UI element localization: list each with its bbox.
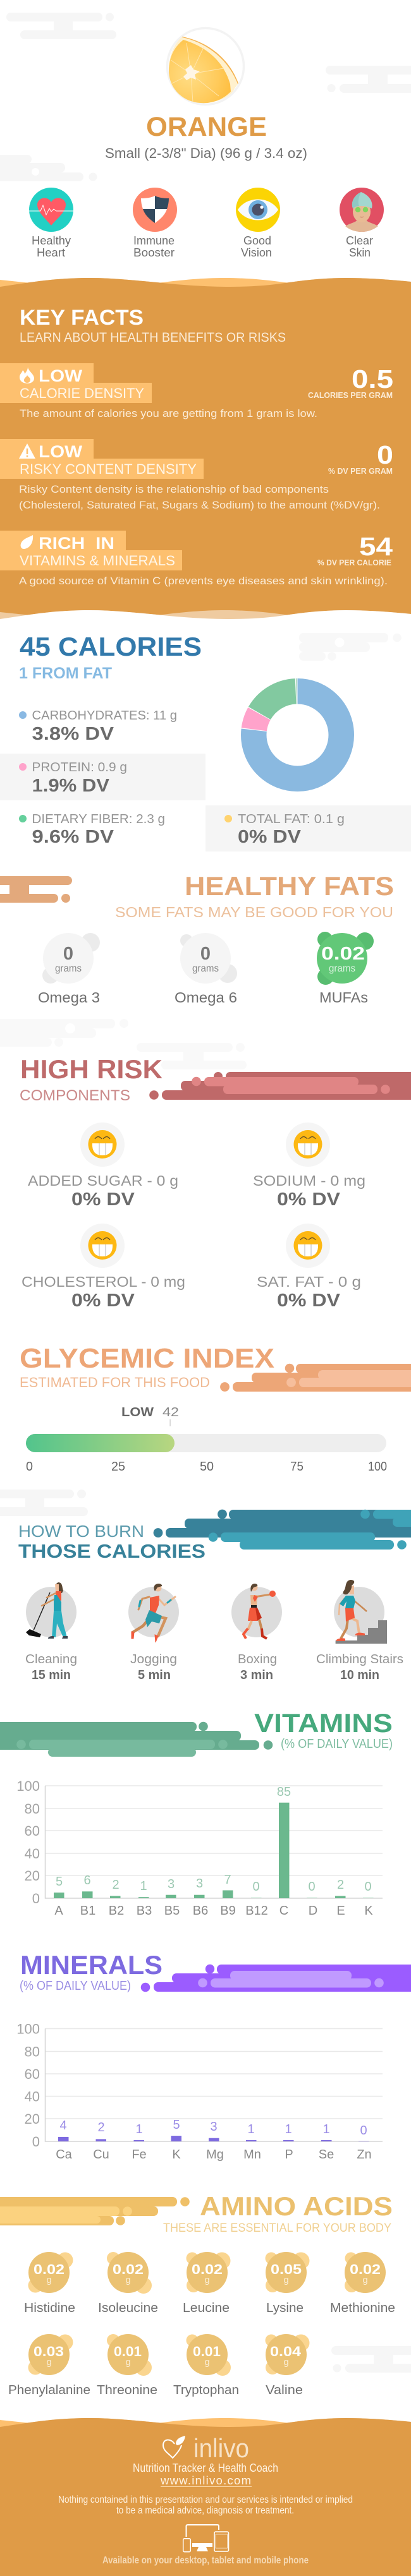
icon: person boxing [243, 1584, 276, 1639]
icon: person running [132, 1584, 175, 1642]
risk item: added sugar: ADDED SUGAR - 0 g [28, 1172, 178, 1189]
swoosh: minerals [141, 1965, 411, 1992]
bar chart: minerals: 1 [247, 2122, 255, 2136]
icon: devices [183, 2525, 229, 2552]
icon: person climbing stairs [336, 1580, 387, 1644]
label: clear: Clear [346, 234, 373, 247]
logo: heart and leaf [163, 2436, 185, 2458]
subheading: amino acids: THESE ARE ESSENTIAL FOR YOUR BODY [163, 2221, 391, 2235]
swoosh: burn calories [154, 1510, 411, 1550]
icon: grinning face [89, 1231, 116, 1260]
bar chart: vitamins: 7 [224, 1873, 231, 1887]
bar chart: minerals: 0 [32, 2134, 40, 2150]
activity: cleaning: Cleaning [25, 1652, 77, 1666]
legend: total fat [224, 812, 345, 847]
unit: % DV PER CALORIE [317, 558, 391, 567]
label: immune: Immune [133, 234, 175, 247]
heading: glycemic index: GLYCEMIC INDEX [20, 1343, 274, 1374]
heading: high risk: HIGH RISK [20, 1054, 163, 1084]
amino acid: tryptophan: g [204, 2357, 210, 2368]
risk item: sodium: 0% DV [277, 1189, 341, 1210]
swoosh: glycemic index [220, 1364, 411, 1392]
background clouds: high risk [0, 1019, 247, 1069]
rating: low: LOW [39, 366, 83, 385]
bar chart: vitamins: B6 [193, 1904, 208, 1918]
macro band: total fat background [206, 805, 411, 852]
amino acid: tryptophan: Tryptophan [173, 2383, 239, 2397]
bar chart: vitamins: 1 [140, 1879, 147, 1893]
serving size: Small (2-3/8" Dia) (96 g / 3.4 oz) [105, 145, 307, 161]
activity: cleaning: 15 min [32, 1668, 71, 1682]
amino acid: lysine [266, 2252, 310, 2315]
subheading: from fat: 1 FROM FAT [19, 665, 112, 682]
rating: low: LOW [39, 442, 83, 461]
background cloud: amino acids [331, 2346, 411, 2373]
bar chart: minerals: 1 [322, 2122, 330, 2136]
icon: good vision eye [236, 188, 280, 232]
bar chart: vitamins: B5 [164, 1904, 180, 1918]
gauge: glycemic index: 42 [163, 1405, 179, 1419]
icon: healthy heart [29, 188, 73, 232]
value: 0 [377, 440, 393, 469]
fact: low calorie density [0, 363, 393, 419]
bar chart: vitamins: E [336, 1904, 345, 1918]
amino acid: histidine: g [46, 2275, 52, 2285]
description: A good source of Vitamin C (prevents eye diseases and skin wrinkling). [19, 575, 388, 587]
background clouds: header [0, 13, 411, 181]
amino acid: methionine [330, 2252, 395, 2315]
amino acid: valine: 0.04 [270, 2344, 302, 2359]
icon: grinning face [293, 1130, 322, 1159]
subheading: glycemic index: ESTIMATED FOR THIS FOOD [20, 1375, 210, 1390]
bar chart: minerals: K [172, 2148, 181, 2162]
bar chart: vitamins: 3 [196, 1877, 203, 1891]
bar chart: minerals: 20 [25, 2111, 40, 2127]
icon: clear skin face [340, 188, 384, 232]
bar chart: minerals: 3 [210, 2120, 218, 2134]
bar chart: vitamins: 0 [32, 1891, 40, 1906]
risk item: added sugar [28, 1122, 178, 1210]
background cloud: burn [0, 1490, 88, 1516]
bar chart: vitamins: B2 [109, 1904, 124, 1918]
amino acid: phenylalanine: 0.03 [34, 2344, 64, 2359]
gauge: glycemic index: 0 [26, 1460, 33, 1474]
value: 54 [359, 532, 393, 561]
amino acid: methionine: 0.02 [350, 2261, 381, 2277]
activity: climbing stairs: 10 min [340, 1668, 379, 1682]
amino acid: lysine: 0.05 [271, 2261, 302, 2277]
bar chart: vitamins: D [309, 1904, 317, 1918]
label: vision: Vision [241, 246, 272, 259]
bar chart: minerals: 80 [25, 2044, 40, 2059]
amino acid: valine: Valine [266, 2383, 303, 2397]
heading: calories: 45 CALORIES [20, 632, 202, 661]
heading: key facts: KEY FACTS [20, 306, 144, 330]
risk item: saturated fat: SAT. FAT - 0 g [257, 1273, 361, 1290]
amino acid: tryptophan [173, 2334, 239, 2397]
heading: healthy fats: HEALTHY FATS [185, 871, 394, 901]
swoosh: amino acids [0, 2197, 190, 2225]
description: The amount of calories you are getting from 1 gram is low. [20, 407, 317, 419]
risk item: added sugar: 0% DV [71, 1189, 135, 1210]
amino acid: histidine: 0.02 [34, 2261, 64, 2277]
metric name: RISKY CONTENT DENSITY [20, 461, 197, 477]
availability note: Available on your desktop, tablet and mobile phone [102, 2555, 309, 2566]
heading: how to burn: HOW TO BURN [18, 1522, 144, 1541]
activity: boxing [231, 1584, 282, 1682]
activity: jogging: Jogging [130, 1652, 177, 1666]
bar chart: vitamins [16, 1778, 383, 1918]
subheading: vitamins: (% OF DAILY VALUE) [281, 1737, 393, 1751]
description line 2: (Cholesterol, Saturated Fat, Sugars & Sodium) to the amount (%DV/gr). [19, 499, 380, 511]
amino acid: threonine: 0.01 [114, 2344, 142, 2359]
legend: carbohydrates [19, 709, 177, 744]
bar chart: minerals: Ca [56, 2148, 73, 2162]
subheading: minerals: (% OF DAILY VALUE) [20, 1979, 131, 1993]
bar chart: vitamins: 60 [25, 1823, 40, 1839]
legend: total fat: 0% DV [238, 827, 302, 847]
risk item: saturated fat: 0% DV [277, 1291, 341, 1311]
bar chart: vitamins: B12 [245, 1904, 268, 1918]
bar chart: vitamins: 2 [337, 1878, 344, 1892]
icon: grinning face [293, 1231, 322, 1260]
bar chart: minerals: 1 [135, 2122, 143, 2136]
bar chart: vitamins: 2 [112, 1878, 120, 1892]
donut chart: macronutrients [254, 691, 341, 779]
logo wordmark: inlivo [193, 2433, 249, 2463]
bar chart: minerals: 100 [16, 2021, 40, 2037]
amino acid: valine: g [283, 2357, 289, 2368]
bar chart: minerals: Mn [243, 2148, 261, 2162]
amino acid: valine [266, 2334, 310, 2397]
amino acid: threonine [97, 2334, 157, 2397]
risk item: saturated fat [257, 1224, 361, 1311]
bar chart: vitamins: K [364, 1904, 373, 1918]
label: healthy heart: Healthy [32, 234, 71, 247]
amino acid: leucine: 0.02 [192, 2261, 223, 2277]
metric name: VITAMINS & MINERALS [20, 553, 175, 569]
macro band: protein background [0, 754, 206, 800]
amino acid: lysine: Lysine [266, 2301, 304, 2315]
subheading: healthy fats: SOME FATS MAY BE GOOD FOR YOU [115, 904, 393, 920]
heading: those calories: THOSE CALORIES [18, 1540, 206, 1562]
activity: cleaning [25, 1582, 77, 1682]
activity: jogging: 5 min [138, 1668, 171, 1682]
risk item: sodium [253, 1122, 365, 1210]
bar chart: minerals: 2 [97, 2121, 105, 2134]
legend: total fat: TOTAL FAT: 0.1 g [238, 812, 345, 826]
icon: flame [20, 367, 34, 383]
bar chart: vitamins: 0 [364, 1880, 372, 1894]
gauge: glycemic index: LOW [121, 1405, 154, 1419]
amino acid: lysine: g [283, 2275, 289, 2285]
bar chart: minerals: Cu [93, 2148, 109, 2162]
bar chart: vitamins: 85 [277, 1785, 291, 1799]
bar chart: minerals: Fe [132, 2148, 147, 2162]
fat: omega 6: Omega 6 [175, 989, 237, 1006]
rating: rich in: RICH IN [39, 534, 114, 553]
value: 0.5 [352, 364, 393, 394]
bar chart: vitamins: C [279, 1904, 288, 1918]
bar chart: vitamins: 20 [25, 1868, 40, 1884]
bar chart: vitamins: 40 [25, 1846, 40, 1862]
legend: carbohydrates: CARBOHYDRATES: 11 g [32, 709, 177, 723]
bar chart: vitamins: B9 [220, 1904, 236, 1918]
legend: protein: 1.9% DV [32, 776, 110, 796]
panel: footer [0, 2418, 411, 2576]
activity: boxing: Boxing [238, 1652, 277, 1666]
gauge: glycemic index: 50 [200, 1460, 214, 1474]
icon: warning triangle [19, 443, 35, 459]
disclaimer: Nothing contained in this presentation and our services is intended or implied [58, 2495, 353, 2505]
risk item: cholesterol: CHOLESTEROL - 0 mg [21, 1273, 185, 1290]
fat: omega 6: 0 [200, 944, 211, 964]
swoosh: healthy fats [0, 876, 72, 903]
bar chart: minerals: 5 [173, 2118, 180, 2132]
unit: CALORIES PER GRAM [308, 390, 393, 400]
icon: grinning face [89, 1130, 116, 1159]
amino acid: threonine: g [125, 2357, 131, 2368]
bar chart: vitamins: 0 [252, 1880, 260, 1894]
legend: carbohydrates: 3.8% DV [32, 724, 114, 744]
swoosh: high risk [149, 1072, 411, 1100]
bar chart: vitamins: 3 [168, 1877, 175, 1891]
tagline: Nutrition Tracker & Health Coach [133, 2461, 278, 2474]
panel: key facts [0, 278, 411, 629]
fact: low risky content density [0, 439, 393, 511]
heading: minerals: MINERALS [20, 1950, 163, 1980]
metric name: CALORIE DENSITY [20, 385, 144, 401]
activity: climbing stairs: Climbing Stairs [316, 1652, 403, 1666]
bar chart: vitamins: A [54, 1904, 63, 1918]
amino acid: phenylalanine: Phenylalanine [8, 2383, 90, 2397]
subheading: LEARN ABOUT HEALTH BENEFITS OR RISKS [20, 330, 286, 345]
amino acid: leucine: g [204, 2275, 210, 2285]
amino acid: phenylalanine: g [46, 2357, 52, 2368]
legend: dietary fiber [19, 812, 165, 847]
fat: omega 6 [175, 933, 237, 1006]
label: booster: Booster [133, 246, 175, 259]
fat: mufas: grams [329, 963, 355, 974]
amino acid: isoleucine: 0.02 [113, 2261, 144, 2277]
amino acid: methionine: Methionine [330, 2301, 395, 2315]
fact: rich in vitamins and minerals [0, 531, 393, 587]
fat: mufas: MUFAs [319, 989, 368, 1006]
unit: % DV PER GRAM [328, 466, 393, 476]
icon: orange slice in ring [167, 28, 244, 105]
bar chart: minerals: 4 [59, 2119, 67, 2133]
amino acid: phenylalanine [8, 2334, 90, 2397]
bar chart: minerals: 0 [360, 2124, 367, 2138]
amino acid: isoleucine [98, 2252, 158, 2315]
legend: dietary fiber: 9.6% DV [32, 827, 114, 847]
legend: protein: PROTEIN: 0.9 g [32, 761, 127, 774]
bar chart: vitamins: 6 [83, 1874, 91, 1887]
gauge: glycemic index [26, 1405, 387, 1474]
bar chart: vitamins: 100 [16, 1778, 40, 1794]
label: good: Good [243, 234, 271, 247]
risk item: sodium: SODIUM - 0 mg [253, 1172, 365, 1189]
amino acid: isoleucine: g [125, 2275, 131, 2285]
label: heart: Heart [37, 246, 65, 259]
icon: immune shield [133, 188, 177, 232]
background cloud: calories [299, 633, 402, 661]
amino acid: leucine: Leucine [183, 2301, 230, 2315]
bar chart: minerals: 40 [25, 2088, 40, 2105]
legend: protein [19, 761, 127, 796]
activity: climbing stairs [316, 1580, 403, 1682]
website: www.inlivo.com [160, 2474, 251, 2487]
bar chart: vitamins: 0 [308, 1880, 316, 1894]
icon: person sweeping [26, 1582, 68, 1639]
swoosh: vitamins [0, 1722, 273, 1757]
amino acid: threonine: Threonine [97, 2383, 157, 2397]
bar chart: minerals: Zn [357, 2148, 372, 2162]
bar chart: vitamins: B1 [80, 1904, 95, 1918]
bar chart: minerals: Mg [206, 2148, 224, 2162]
risk item: cholesterol [21, 1224, 185, 1311]
fat: omega 3: Omega 3 [38, 989, 100, 1006]
heading: amino acids: AMINO ACIDS [200, 2191, 393, 2221]
bar chart: vitamins: B3 [137, 1904, 152, 1918]
bar chart: minerals: P [285, 2148, 293, 2162]
fat: mufas: 0.02 [321, 944, 365, 964]
amino acid: tryptophan: 0.01 [193, 2344, 221, 2359]
bar chart: vitamins: 5 [56, 1875, 63, 1889]
label: skin: Skin [349, 246, 371, 259]
bar chart: minerals: 60 [25, 2066, 40, 2082]
bar chart: minerals: Se [319, 2148, 334, 2162]
fat: mufas [317, 932, 374, 1006]
amino acid: histidine [24, 2252, 75, 2315]
title: ORANGE [146, 112, 267, 142]
fat: omega 3 [38, 933, 100, 1006]
risk item: cholesterol: 0% DV [71, 1291, 135, 1311]
activity: boxing: 3 min [240, 1668, 273, 1682]
bar chart: vitamins: 80 [25, 1801, 40, 1817]
icon: leaf [21, 535, 33, 549]
gauge: glycemic index: 75 [290, 1460, 304, 1474]
amino acid: leucine [183, 2252, 230, 2315]
fat: omega 6: grams [192, 963, 219, 974]
bar chart: minerals [16, 2021, 383, 2162]
amino acid: isoleucine: Isoleucine [98, 2301, 158, 2315]
gauge: glycemic index: 25 [111, 1460, 125, 1474]
gauge: glycemic index: 100 [368, 1460, 387, 1474]
fat: omega 3: 0 [63, 944, 73, 964]
legend: dietary fiber: DIETARY FIBER: 2.3 g [32, 812, 165, 826]
subheading: components: COMPONENTS [20, 1087, 130, 1104]
amino acid: histidine: Histidine [24, 2301, 75, 2315]
activity: jogging [128, 1584, 179, 1682]
disclaimer line 2: to be a medical advice, diagnosis or treatment. [116, 2505, 294, 2516]
bar chart: minerals: 1 [285, 2122, 292, 2136]
description: Risky Content density is the relationship of bad components [19, 483, 329, 495]
heading: vitamins: VITAMINS [254, 1708, 393, 1738]
fat: omega 3: grams [55, 963, 82, 974]
amino acid: methionine: g [362, 2275, 368, 2285]
